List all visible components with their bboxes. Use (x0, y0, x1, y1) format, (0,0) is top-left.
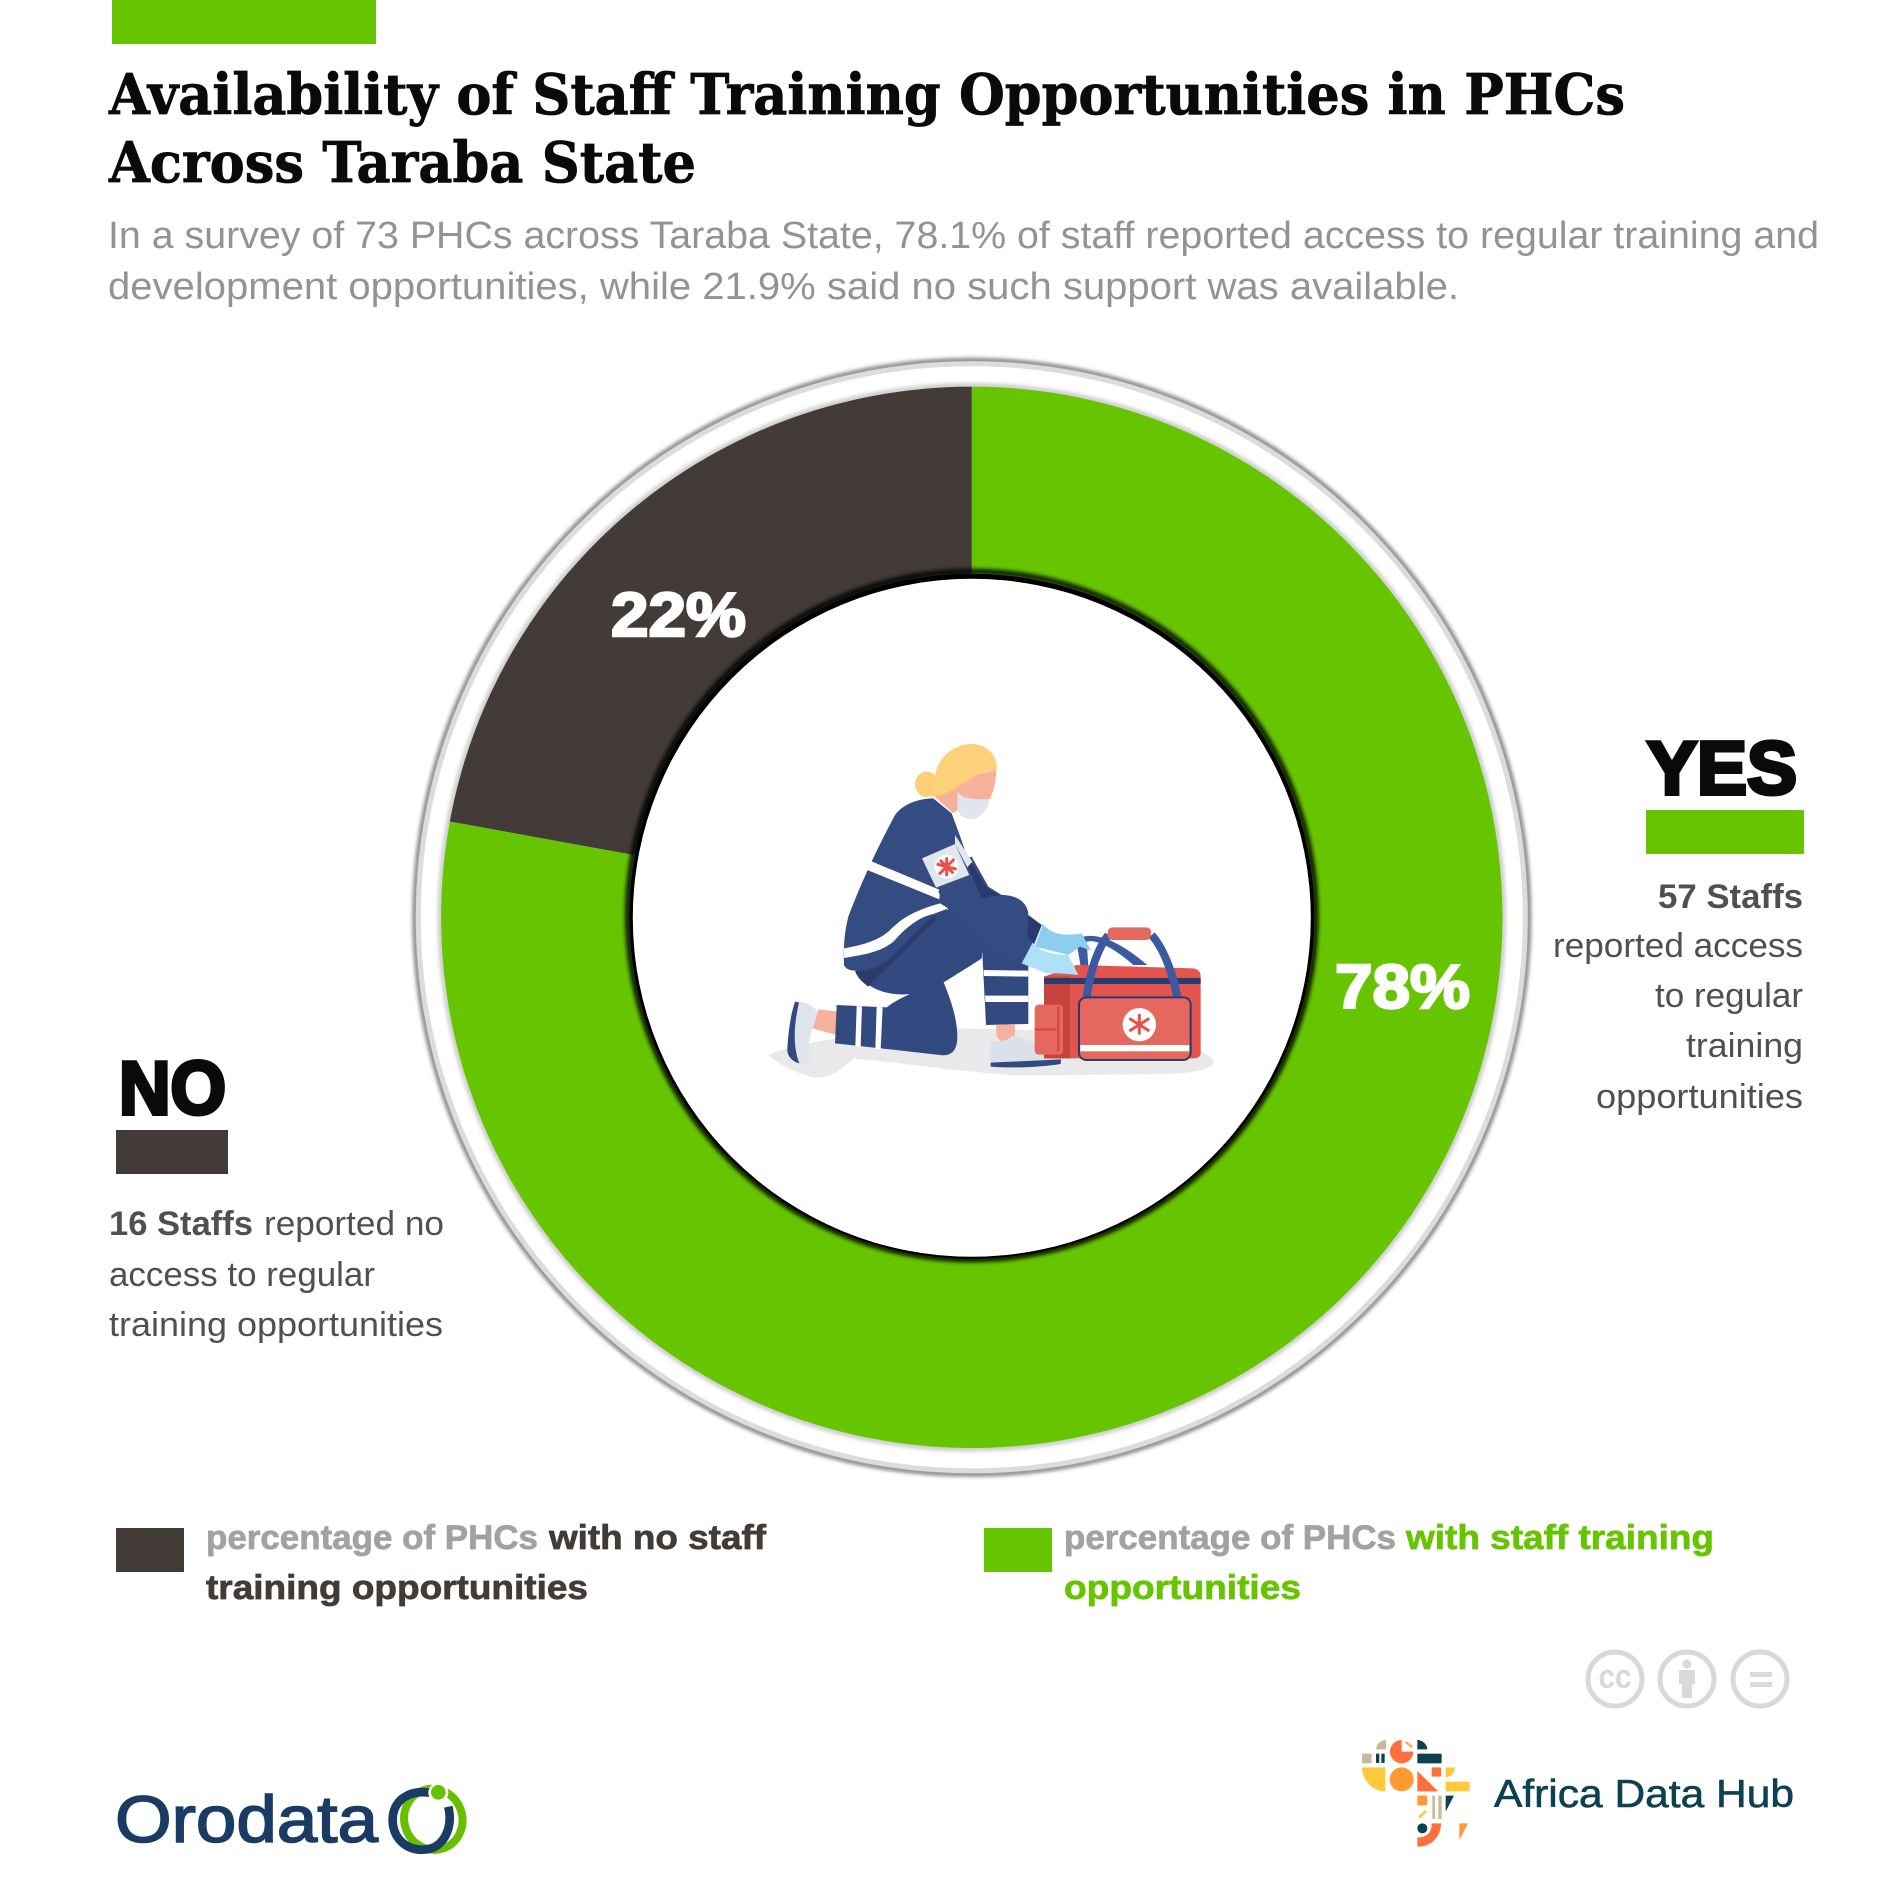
sleeve (938, 857, 1042, 965)
gloves (1035, 924, 1091, 955)
label: 78%: 78% (1335, 953, 1470, 1022)
yes description: opportunities (1596, 1078, 1803, 1116)
slice: no 22% (450, 387, 972, 856)
swatch (116, 1528, 184, 1572)
yes heading: YES (1647, 726, 1797, 810)
armband (922, 844, 969, 888)
bag strap back (1077, 936, 1147, 967)
swatch (984, 1528, 1052, 1572)
face mask (957, 792, 990, 819)
no description: 16 Staffs (109, 1205, 253, 1243)
subtitle: In a survey of 73 PHCs across Taraba State, 78.1% of staff reported access to regular training and (108, 215, 1819, 257)
yes description (1553, 878, 1803, 1116)
logo mark (393, 1781, 471, 1858)
yes description: to regular (1655, 977, 1803, 1015)
title: Availability of Staff Training Opportunities in PHCs (108, 62, 1625, 128)
title: Across Taraba State (108, 130, 696, 196)
torso (844, 798, 973, 971)
bag front pocket (1079, 997, 1191, 1060)
legend: with training (984, 1519, 1714, 1607)
back leg and foot (813, 1009, 838, 1035)
no description: training opportunities (109, 1306, 443, 1344)
bag body (1044, 965, 1201, 1058)
legend: no training (116, 1519, 767, 1607)
yes swatch (1646, 810, 1804, 854)
bag side pocket (1035, 1005, 1063, 1055)
thigh (855, 907, 983, 994)
subtitle: development opportunities, while 21.9% said no such support was available. (108, 266, 1459, 308)
no heading: NO (119, 1046, 226, 1130)
illustration: paramedic with medical bag (768, 744, 1214, 1078)
bag medical cross (1123, 1008, 1156, 1041)
legend text: with no staff (548, 1519, 767, 1557)
legend text: percentage of PHCs (206, 1519, 538, 1557)
legend text (206, 1519, 767, 1607)
front shin (982, 933, 1028, 1025)
no swatch (116, 1130, 228, 1174)
logo text: Orodata (115, 1782, 378, 1856)
no description: reported no (264, 1205, 444, 1243)
label: 22%: 22% (611, 581, 746, 650)
legend text: percentage of PHCs (1064, 1519, 1396, 1557)
armband cross (935, 855, 959, 879)
hair (930, 744, 997, 797)
title (108, 62, 1625, 196)
no description: access to regular (109, 1256, 375, 1294)
subtitle (108, 215, 1819, 308)
legend text: opportunities (1064, 1569, 1301, 1607)
label: yes (1553, 726, 1804, 1116)
accent bar (112, 0, 376, 44)
logo text: Africa Data Hub (1494, 1773, 1794, 1816)
icon: attribution (1660, 1652, 1714, 1706)
yes description: reported access (1553, 927, 1803, 965)
yes description: training (1686, 1027, 1803, 1065)
bag handle (1087, 935, 1177, 997)
logo: africa data hub (1362, 1740, 1794, 1847)
licence icons (1588, 1652, 1787, 1706)
legend text: with staff training (1405, 1519, 1714, 1557)
yes description: 57 Staffs (1658, 878, 1803, 916)
shin stripes (984, 970, 1028, 1002)
hair bun (915, 772, 938, 797)
ground shadow (768, 1028, 1214, 1078)
legend text: training opportunities (206, 1569, 588, 1607)
logo: orodata (115, 1781, 471, 1858)
icon: cc (1588, 1652, 1642, 1706)
logo mark (1362, 1740, 1470, 1847)
no description (109, 1205, 444, 1344)
donut chart (415, 360, 1529, 1474)
front ankle and shoe (996, 1024, 1015, 1043)
neck and face (933, 770, 996, 813)
leg stripes (855, 1006, 883, 1049)
icon: cc: cc (1598, 1658, 1632, 1696)
icon: no derivatives (1733, 1652, 1787, 1706)
slice: yes 78% (441, 387, 1502, 1448)
legend text (1064, 1519, 1714, 1607)
torso stripes (867, 860, 940, 899)
label: no (109, 1046, 444, 1344)
glove front (1022, 943, 1078, 975)
